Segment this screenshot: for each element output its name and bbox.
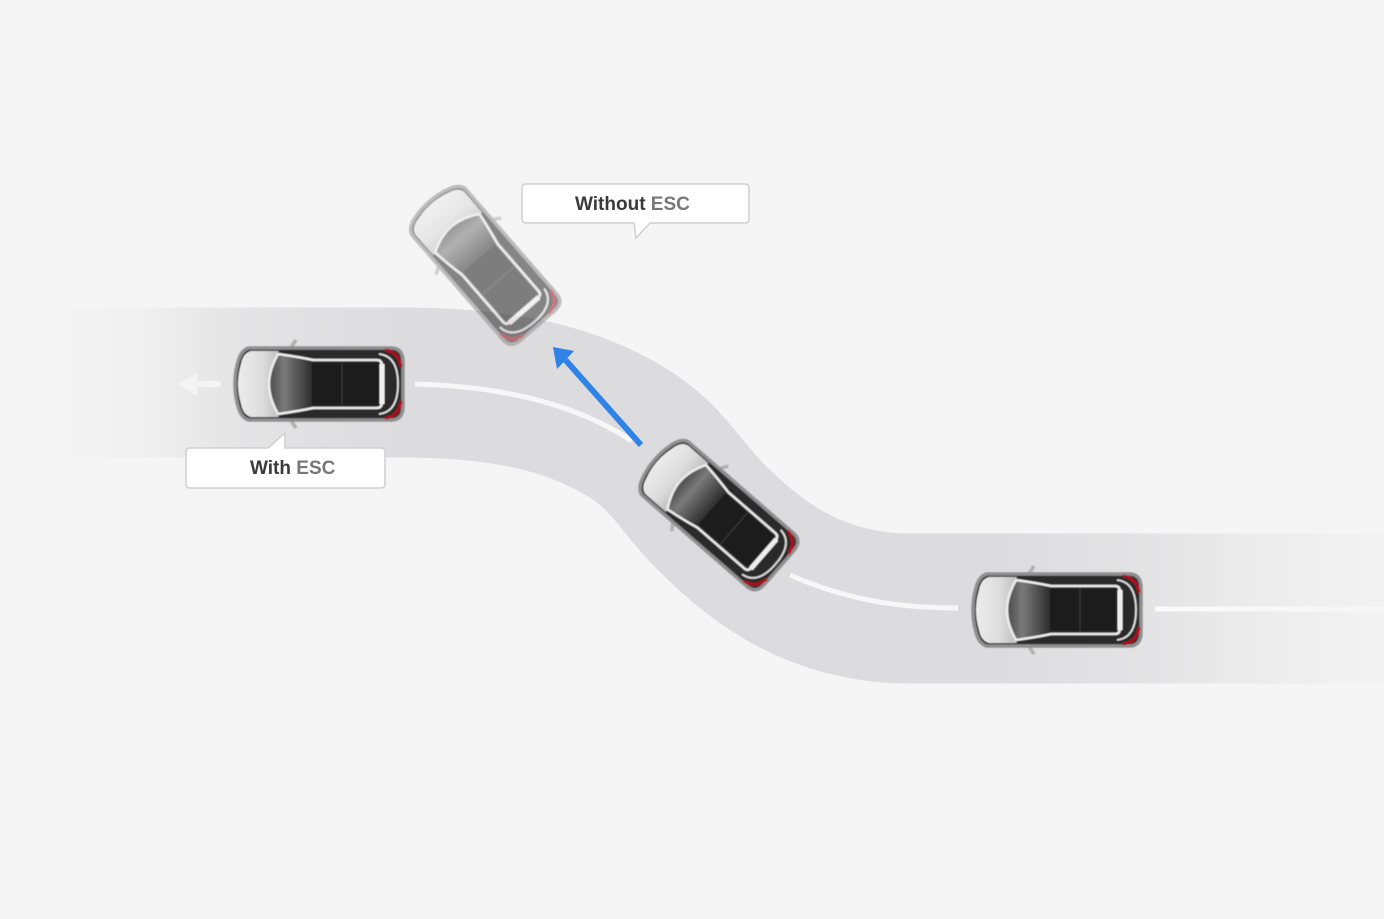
car: without ESC ghost	[397, 173, 570, 354]
callout: without ESC: Without ESC	[575, 194, 690, 215]
car: mid-corner	[627, 427, 807, 600]
callout: without ESC	[522, 184, 749, 238]
callout: with ESC: With ESC	[250, 458, 336, 479]
road	[0, 382, 1384, 608]
car: with ESC	[235, 340, 403, 428]
car: entering corner	[973, 566, 1141, 654]
arrow: skid direction	[553, 347, 643, 447]
icon: white direction arrow	[178, 373, 221, 396]
callout: with ESC	[186, 433, 385, 488]
road centre line	[415, 384, 1384, 609]
